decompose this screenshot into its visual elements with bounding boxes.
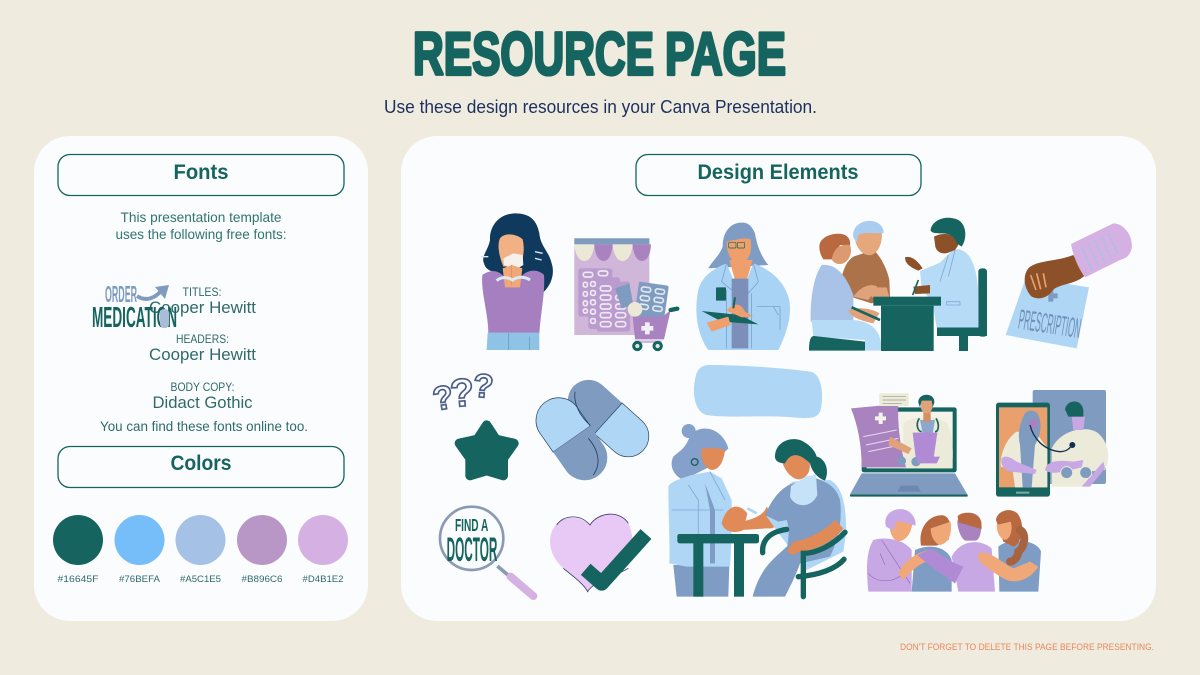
heading: fonts [58,154,344,196]
illustration: telehealth laptop [850,393,968,497]
illustration: question marks: ? [448,370,476,416]
panel: fonts and colors: MEDICATION [92,302,177,334]
footer note: DON'T FORGET TO DELETE THIS PAGE BEFORE PRESENTING. [900,642,1154,652]
illustration: patients with doctor at desk [809,218,987,351]
illustration: question marks: ? [430,379,456,419]
heading: design elements: Design Elements [698,161,858,184]
panel: design elements [401,136,1156,621]
illustration: woman sneezing [481,213,553,350]
title: PAGE [665,20,786,88]
illustration: question marks: ? [471,368,495,406]
font list: Cooper Hewitt [149,298,256,317]
illustration: heart with check [550,514,646,592]
title: RESOURCE [413,20,654,88]
font list [100,285,308,434]
font list: TITLES: [182,285,222,299]
font list: You can find these fonts online too. [100,418,308,434]
illustration: capsules [527,371,657,489]
text block: font intro [116,209,286,242]
illustration: question marks [430,368,495,419]
illustration: telehealth tablet and phone [996,390,1108,497]
illustration: nurse treating patient [668,424,846,597]
illustration: star [459,425,514,476]
heading: fonts: Fonts [174,161,228,184]
order medication sticker: ORDER [105,281,137,307]
illustration: find a doctor magnifier: DOCTOR [447,531,497,569]
panel: fonts and colors [34,136,368,621]
heading: colors [58,446,344,488]
color swatches: #76BEFA [119,574,161,585]
text block: font intro: This presentation template [120,209,282,225]
font list: HEADERS: [176,332,229,346]
illustration: speech bubble [694,365,822,418]
illustration: find a doctor magnifier [440,507,533,596]
color swatches: #B896C6 [242,574,282,585]
illustration: group of four people [867,509,1041,592]
heading: design elements [636,154,921,196]
text block: font intro: uses the following free fonts: [116,226,286,242]
font list: Didact Gothic [152,393,253,412]
font list: BODY COPY: [170,380,234,394]
heading: colors: Colors [170,452,232,475]
illustration: find a doctor magnifier: FIND A [455,515,488,535]
subtitle: Use these design resources in your Canva Presentation. [384,97,817,117]
illustration: doctor with clipboard [696,223,790,350]
color swatches: #A5C1E5 [180,574,221,585]
order medication sticker [92,281,177,334]
font list: Cooper Hewitt [149,345,256,364]
color swatches [53,515,348,585]
color swatches: #16645F [58,574,99,585]
illustration: online pharmacy with cart [574,238,677,350]
color swatches: #D4B1E2 [302,574,344,585]
illustration: hand with prescription [1006,223,1132,348]
